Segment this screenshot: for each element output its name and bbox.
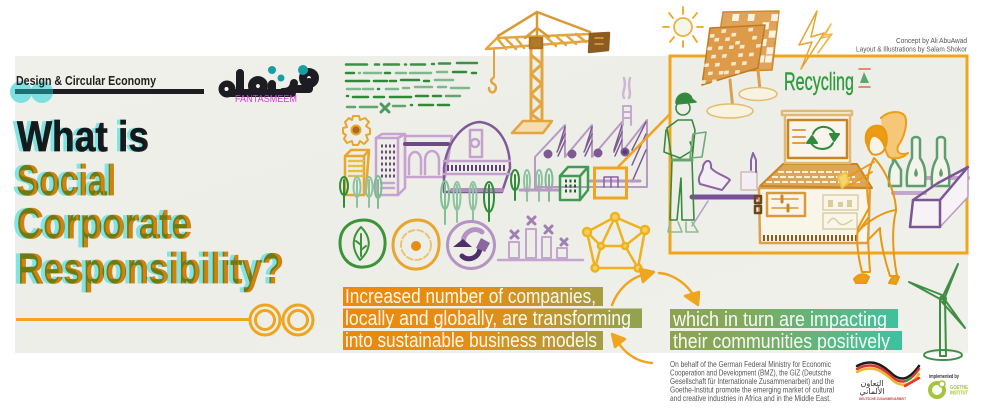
wind turbine bbox=[909, 264, 965, 360]
machine base bbox=[755, 188, 870, 243]
woman figure bbox=[838, 112, 908, 284]
conveyor belt: left bbox=[692, 153, 758, 226]
subtitle rule bbox=[15, 89, 204, 94]
green scribble text lines bbox=[346, 63, 477, 112]
tree bbox=[441, 181, 449, 224]
logo: Fantasmeem bbox=[222, 65, 315, 105]
tree bbox=[354, 177, 360, 207]
text lines bbox=[672, 309, 890, 353]
funding paragraph: and creative industries in Africa and in the Middle East. bbox=[670, 393, 831, 403]
small focus box bbox=[594, 168, 626, 198]
arrow: back bbox=[612, 334, 652, 363]
credits bbox=[856, 36, 967, 54]
funding paragraph: Goethe-Institut promote the emerging market of cultural bbox=[670, 384, 834, 394]
laptop machine bbox=[755, 111, 872, 243]
hands bbox=[838, 172, 849, 188]
arched hall bbox=[405, 136, 452, 177]
screen bbox=[782, 111, 852, 163]
Arabic wordmark second line: الألماني bbox=[859, 386, 885, 396]
icon: network bbox=[583, 213, 649, 272]
tree bbox=[366, 177, 372, 207]
panel: paper background bbox=[15, 56, 968, 353]
icon: purple recycle circle bbox=[448, 222, 494, 268]
title line: What is: What is bbox=[17, 113, 149, 161]
text block: companies bbox=[343, 286, 642, 352]
waste items bbox=[699, 153, 757, 190]
title line: Social: Social bbox=[17, 157, 116, 205]
funding paragraph: Cooperation and Development (BMZ), the GIZ (Deutsche bbox=[670, 368, 831, 378]
goethe word: GOETHE bbox=[950, 385, 968, 391]
trees row bbox=[340, 169, 552, 224]
tree bbox=[454, 182, 460, 222]
tree bbox=[374, 176, 382, 208]
decorative title rule with rings bbox=[16, 305, 313, 335]
credit line: Layout & Illustrations by Salam Shokor bbox=[856, 44, 967, 54]
institut word: INSTITUT bbox=[950, 390, 968, 396]
highlight bars bbox=[670, 309, 902, 350]
German wordmark: DEUTSCHE ZUSAMMENARBEIT bbox=[859, 397, 907, 401]
text lines: their communities positively bbox=[673, 331, 890, 353]
tree bbox=[484, 182, 494, 221]
conveyor line with green machine bbox=[520, 167, 640, 200]
bottles and conveyor: right bbox=[889, 137, 968, 227]
Arabic wordmark: التعاون bbox=[860, 379, 884, 388]
worker figure bbox=[664, 93, 706, 232]
tree bbox=[340, 177, 348, 207]
open crate bbox=[910, 167, 968, 227]
keyboard bbox=[760, 164, 872, 188]
observatory dome bbox=[444, 122, 510, 192]
bottles bbox=[889, 137, 949, 186]
icon: recycle arrows bbox=[807, 127, 839, 149]
highlight bars bbox=[343, 287, 642, 350]
subtitle: Design & Circular Economy bbox=[16, 74, 156, 88]
text lines bbox=[345, 286, 631, 352]
recycling handwritten heading bbox=[784, 68, 870, 96]
icon: bar chart bbox=[498, 217, 583, 260]
crane bbox=[486, 12, 609, 133]
arrow: up bbox=[612, 269, 654, 305]
title bbox=[13, 113, 284, 293]
icon: gear bbox=[343, 116, 370, 145]
logo: German Lebanese cooperation bbox=[857, 362, 919, 401]
back panel bbox=[714, 11, 779, 100]
title line: Corporate: Corporate bbox=[17, 200, 192, 248]
hair cap bbox=[866, 126, 887, 150]
icon: orange cog circle bbox=[393, 220, 439, 269]
tree bbox=[470, 182, 476, 222]
icon: sun bbox=[663, 7, 703, 47]
text lines: locally and globally, are transforming bbox=[345, 308, 631, 330]
purple tower building bbox=[376, 134, 405, 195]
credit line: Concept by Ali AbuAwad bbox=[896, 36, 967, 45]
tree bbox=[536, 170, 542, 201]
icon: cedar flag bbox=[859, 69, 870, 87]
logo: Goethe Institut bbox=[929, 374, 968, 397]
legs bbox=[857, 158, 897, 276]
flag swoosh bbox=[857, 362, 919, 386]
implemented by: implemented by bbox=[929, 374, 959, 380]
tree bbox=[524, 170, 530, 201]
small orange building bbox=[345, 150, 369, 195]
face bbox=[869, 136, 885, 155]
heading block bbox=[10, 74, 204, 103]
title line: Social: Social bbox=[13, 157, 112, 205]
callout frame bbox=[594, 56, 967, 253]
conveyor line bbox=[520, 181, 640, 190]
icon: green machine bbox=[560, 167, 588, 200]
arrows: cycle bbox=[612, 269, 699, 363]
title line: Responsibility?: Responsibility? bbox=[14, 245, 280, 293]
recycling word: Recycling bbox=[784, 68, 854, 96]
shoes bbox=[854, 274, 899, 284]
title line: Corporate: Corporate bbox=[13, 200, 188, 248]
title line: What is: What is bbox=[13, 113, 146, 161]
funding paragraph bbox=[670, 359, 834, 403]
logo mark bbox=[222, 65, 315, 94]
arm bbox=[843, 162, 874, 186]
funding paragraph: Gesellschaft für Internationale Zusammenarbeit) and the bbox=[670, 376, 834, 386]
text lines: Increased number of companies, bbox=[345, 286, 596, 308]
goethe mark bbox=[930, 381, 945, 397]
text block: impact bbox=[670, 309, 902, 353]
large recycling frame bbox=[670, 56, 967, 253]
tree bbox=[546, 169, 552, 201]
connector line bbox=[618, 114, 670, 167]
funding paragraph: On behalf of the German Federal Ministry for Economic bbox=[670, 359, 832, 369]
icon: cyan circles bbox=[10, 81, 53, 103]
factory bbox=[535, 78, 647, 190]
front panel bbox=[701, 25, 765, 118]
text lines: into sustainable business models bbox=[345, 330, 597, 352]
text lines: which in turn are impacting bbox=[672, 309, 887, 331]
logo wordmark: FANTASMEEM bbox=[235, 94, 297, 105]
icon: leaf circle bbox=[340, 220, 385, 267]
ponytail bbox=[881, 112, 908, 158]
arrow: right bbox=[659, 273, 699, 305]
solar panels bbox=[701, 11, 779, 118]
icon: lightning bolts bbox=[799, 11, 832, 69]
tree bbox=[511, 170, 519, 200]
title line: Responsibility?: Responsibility? bbox=[18, 245, 284, 293]
